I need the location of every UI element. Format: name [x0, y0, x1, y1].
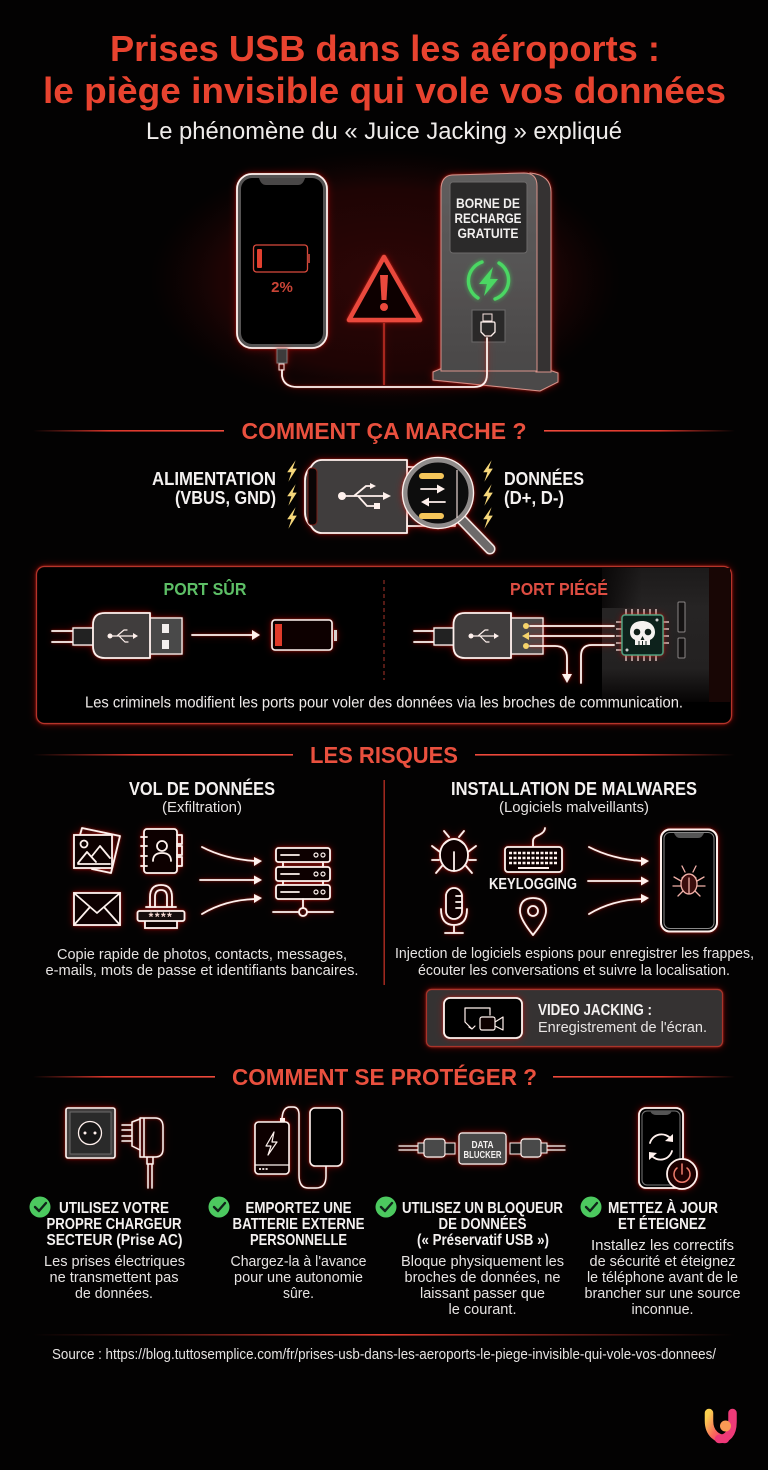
- step text: [584, 1237, 740, 1318]
- step 3: data blocker: [376, 1133, 565, 1318]
- title: le piège invisible qui vole vos données: [43, 70, 726, 111]
- step text: Bloque physiquement les: [401, 1253, 564, 1270]
- heading: VOL DE DONNÉES: [129, 778, 275, 799]
- source line: Source : https://blog.tuttosemplice.com/fr/prises-usb-dans-les-aeroports-le-piege-invisible-qui-vole-vos-donnees/: [52, 1347, 717, 1363]
- hero illustration: phone, warning and charging kiosk: [150, 150, 620, 410]
- step heading: UTILISEZ UN BLOQUEUR: [402, 1200, 563, 1217]
- step 2: external battery: [208, 1107, 366, 1302]
- step text: [401, 1253, 564, 1318]
- icon: infected phone: [661, 830, 717, 932]
- step heading: DE DONNÉES: [438, 1216, 526, 1233]
- step text: [44, 1253, 185, 1302]
- panel caption: Les criminels modifient les ports pour voler des données via les broches de communication.: [85, 694, 683, 712]
- icon: server: [273, 848, 333, 916]
- magnifier: [402, 458, 490, 549]
- kiosk screen: RECHARGE: [454, 211, 522, 226]
- trapped port background: [602, 568, 730, 702]
- check icon: [580, 1196, 602, 1218]
- section heading: comment ça marche: COMMENT ÇA MARCHE ?: [242, 418, 526, 444]
- lightning bolts: [287, 460, 493, 529]
- panel: malware installation: [395, 779, 754, 1046]
- icon: wall socket and charger: [66, 1108, 163, 1188]
- trapped USB plug: [414, 613, 543, 658]
- step heading: ET ÉTEIGNEZ: [618, 1216, 706, 1233]
- video jacking callout: VIDEO JACKING :: [538, 1002, 652, 1019]
- kiosk USB port: [472, 310, 505, 342]
- slot: [678, 602, 685, 658]
- data label: (D+, D-): [504, 488, 564, 508]
- arrows: [200, 847, 262, 914]
- keylogging label: KEYLOGGING: [489, 876, 577, 893]
- step 1: own charger: [30, 1108, 185, 1302]
- vertical divider: [384, 780, 385, 985]
- step text: Installez les correctifs: [591, 1237, 734, 1254]
- panel: data theft: [46, 778, 358, 979]
- icon: bug: [432, 831, 476, 873]
- step heading: (« Préservatif USB »): [417, 1232, 549, 1249]
- subheading: (Logiciels malveillants): [499, 799, 649, 816]
- icon: power bank and phone: [255, 1107, 342, 1188]
- blocker label: [464, 1140, 502, 1161]
- kiosk screen: GRATUITE: [458, 226, 518, 241]
- icon: microphone: [441, 888, 467, 933]
- data wires: [530, 626, 614, 683]
- step heading: PERSONNELLE: [250, 1232, 347, 1249]
- step heading: METTEZ À JOUR: [608, 1200, 718, 1217]
- step text: de données.: [75, 1285, 153, 1302]
- step text: de sécurité et éteignez: [590, 1253, 736, 1270]
- description: e-mails, mots de passe et identifiants bancaires.: [46, 962, 358, 979]
- section heading: les risques: LES RISQUES: [310, 742, 458, 768]
- heading: INSTALLATION DE MALWARES: [451, 779, 697, 799]
- USB plug with magnifier: [305, 458, 490, 549]
- step 4: update and switch off: [580, 1108, 740, 1318]
- video jacking callout: [426, 990, 722, 1046]
- section heading: comment se protéger: COMMENT SE PROTÉGER ?: [232, 1063, 537, 1090]
- kiosk: [433, 173, 558, 391]
- step heading: SECTEUR (Prise AC): [46, 1232, 182, 1249]
- phone: [237, 174, 327, 348]
- step heading: [232, 1200, 364, 1249]
- step heading: [402, 1200, 563, 1249]
- battery 2%: [254, 245, 310, 296]
- step heading: UTILISEZ VOTRE: [59, 1200, 169, 1217]
- step text: [230, 1253, 366, 1302]
- subtitle: Le phénomène du « Juice Jacking » expliqué: [146, 118, 622, 145]
- blocker label: BLUCKER: [464, 1150, 502, 1161]
- description: Copie rapide de photos, contacts, messages,: [57, 946, 347, 963]
- description: [395, 945, 754, 979]
- title: Prises USB dans les aéroports :: [110, 28, 660, 69]
- data label: DONNÉES: [504, 468, 584, 489]
- check icon: [30, 1196, 50, 1218]
- arrows: [588, 847, 649, 914]
- check icon: [376, 1196, 396, 1218]
- description: [46, 946, 358, 979]
- icon: phone with refresh and power: [639, 1108, 697, 1189]
- empty battery: [272, 620, 337, 650]
- arrow: [192, 630, 260, 640]
- step heading: [608, 1200, 718, 1233]
- icon: keyboard: [505, 828, 562, 872]
- icon: password lock: [138, 885, 184, 928]
- charging cable: [277, 338, 487, 387]
- subheading: (Exfiltration): [162, 799, 242, 816]
- icon: data blocker with USB plugs: [399, 1133, 565, 1164]
- step heading: EMPORTEZ UNE: [246, 1200, 352, 1217]
- blocker label: DATA: [472, 1140, 494, 1151]
- step heading: PROPRE CHARGEUR: [46, 1216, 182, 1233]
- battery 2%: 2%: [271, 279, 293, 296]
- title: [43, 28, 726, 111]
- power label: ALIMENTATION: [152, 469, 276, 489]
- description: Injection de logiciels espions pour enregistrer les frappes,: [395, 945, 754, 962]
- icon: envelope: [74, 893, 120, 925]
- warning triangle: [349, 257, 420, 385]
- step text: ne transmettent pas: [50, 1269, 178, 1286]
- step heading: [46, 1200, 182, 1249]
- step text: inconnue.: [632, 1301, 694, 1318]
- USB symbol: [468, 630, 499, 642]
- icon: contacts: [141, 829, 182, 873]
- icon: password lock: ****: [149, 910, 173, 924]
- step text: le courant.: [448, 1301, 516, 1318]
- safe USB plug: [52, 613, 182, 658]
- trapped port label: PORT PIÉGÉ: [510, 578, 608, 599]
- power label: (VBUS, GND): [175, 488, 276, 508]
- logo: [709, 1413, 732, 1439]
- step text: Chargez-la à l'avance: [230, 1253, 366, 1270]
- safe port label: PORT SÛR: [164, 578, 247, 599]
- data label: [504, 468, 584, 508]
- charging bolt icon: [468, 262, 509, 299]
- step text: le téléphone avant de le: [587, 1269, 738, 1286]
- step text: laissant passer que: [420, 1285, 545, 1302]
- icon: photos: [74, 828, 120, 873]
- icon: landscape phone with camera: [444, 998, 522, 1038]
- power label: [152, 469, 276, 508]
- step heading: BATTERIE EXTERNE: [232, 1216, 364, 1233]
- step text: brancher sur une source: [584, 1285, 740, 1302]
- panel: safe port vs trapped port: [36, 566, 732, 724]
- USB symbol: [338, 483, 391, 509]
- step text: broches de données, ne: [404, 1269, 560, 1286]
- step text: Les prises électriques: [44, 1253, 185, 1270]
- description: écouter les conversations et suivre la localisation.: [418, 962, 730, 979]
- malicious chip with skull: [616, 609, 669, 661]
- icon: location pin: [520, 898, 546, 935]
- USB symbol: [108, 630, 138, 642]
- kiosk screen: BORNE DE: [456, 196, 520, 211]
- kiosk screen: [450, 182, 527, 253]
- check icon: [208, 1196, 230, 1218]
- step text: sûre.: [283, 1285, 314, 1302]
- step text: pour une autonomie: [234, 1269, 363, 1286]
- video jacking callout: Enregistrement de l'écran.: [538, 1019, 707, 1036]
